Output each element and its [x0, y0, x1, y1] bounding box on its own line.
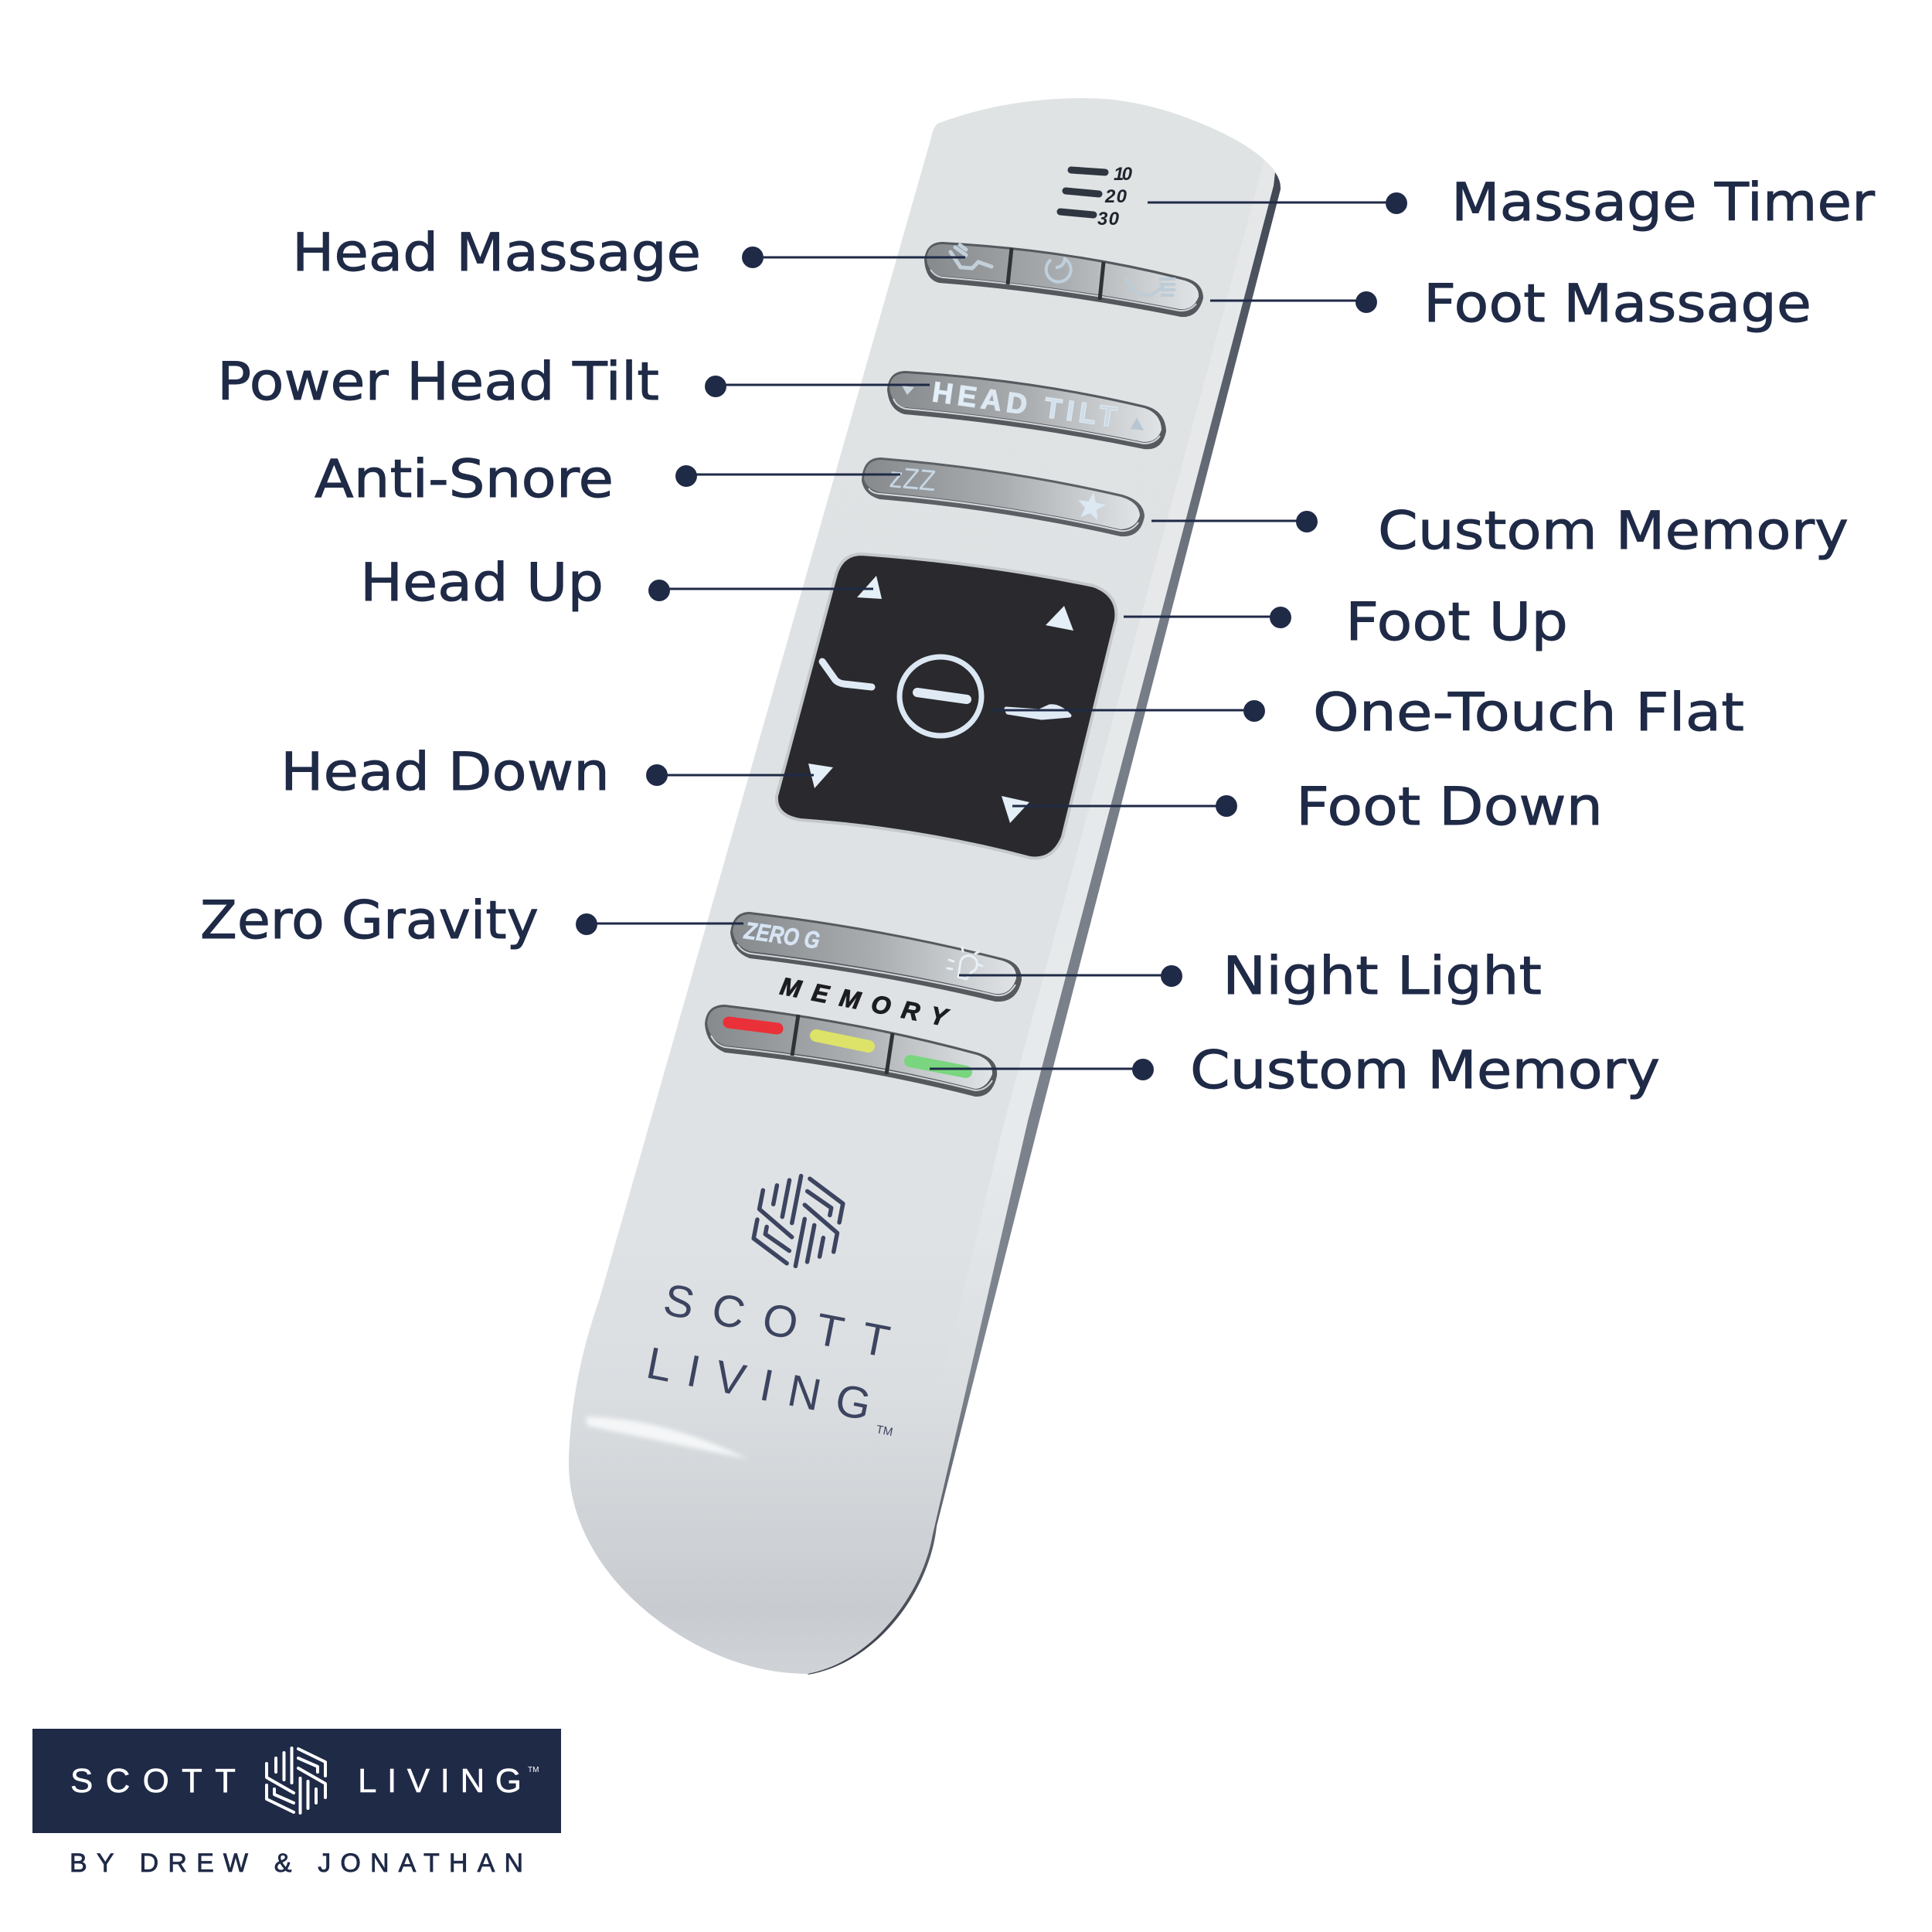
anti-snore and custom memory button — [862, 457, 1145, 536]
head tilt label: HEAD TILT — [930, 376, 1119, 433]
callout: Foot Massage: Foot Massage — [1423, 274, 1811, 335]
head tilt button — [887, 371, 1166, 449]
foot up arrow — [1046, 606, 1073, 631]
foot down arrow — [1002, 796, 1029, 823]
icon: tilt up arrow — [1131, 417, 1144, 430]
callout: Head Down — [281, 742, 814, 803]
flat button bar — [917, 692, 967, 699]
callout: Head Down: Head Down — [281, 742, 610, 803]
callout: Anti-Snore: Anti-Snore — [315, 449, 614, 510]
memory buttons — [705, 1005, 997, 1097]
callout: Foot Down: Foot Down — [1296, 777, 1603, 838]
callout: One-Touch Flat — [992, 682, 1744, 743]
byline: BY DREW & JONATHAN — [70, 1849, 523, 1878]
callout: Anti-Snore — [315, 449, 900, 510]
logo wordmark: SCOTT: SCOTT — [70, 1762, 236, 1800]
massage timer indicators: 10 — [1114, 164, 1133, 185]
icon: massage wave — [1046, 259, 1071, 282]
brand name on remote: LIVING — [643, 1338, 876, 1430]
icon: head massage — [951, 245, 992, 268]
brand logo mark on remote — [750, 1169, 847, 1273]
control pad — [777, 554, 1116, 858]
callout: Zero Gravity: Zero Gravity — [200, 890, 539, 951]
callout: One-Touch Flat: One-Touch Flat — [1313, 682, 1744, 743]
logo wordmark: LIVING: LIVING — [358, 1762, 522, 1800]
callout: Foot Up: Foot Up — [1345, 592, 1568, 653]
callout: Zero Gravity — [200, 890, 743, 951]
flat button ring — [900, 657, 981, 736]
head down arrow — [808, 764, 833, 788]
callout: Custom Memory (star button) — [1151, 501, 1849, 562]
icon: tilt down arrow — [902, 386, 914, 395]
brand name on remote: SCOTT — [660, 1274, 893, 1367]
icon: head incline — [822, 662, 872, 687]
callout: Night Light — [959, 946, 1542, 1007]
callout: Power Head Tilt: Power Head Tilt — [217, 352, 659, 413]
brand logo bar — [32, 1729, 561, 1833]
callout: Custom Memory (color buttons): Custom Memory — [1190, 1040, 1660, 1101]
remote side edge — [808, 164, 1281, 1675]
icon: star — [1078, 492, 1106, 520]
head up arrow — [857, 576, 882, 599]
callout: Head Massage — [292, 223, 965, 284]
callout: Night Light: Night Light — [1223, 946, 1542, 1007]
massage buttons — [924, 242, 1203, 317]
callout: Custom Memory (color buttons) — [930, 1040, 1660, 1101]
callout: Head Up — [360, 553, 873, 614]
massage timer indicators: 30 — [1097, 209, 1120, 230]
yellow memory light — [816, 1036, 869, 1046]
zero g and night light button — [730, 912, 1022, 1002]
callouts — [200, 172, 1875, 1101]
callout: Massage Timer — [1148, 172, 1875, 233]
memory heading: MEMORY — [778, 972, 951, 1032]
trademark: TM — [528, 1766, 539, 1774]
icon: foot massage — [1125, 278, 1175, 295]
zero g label: ZERO G — [742, 917, 821, 954]
massage timer indicators: 20 — [1104, 186, 1128, 207]
face bevel highlight — [939, 160, 1275, 1399]
brand name on remote — [643, 1274, 894, 1439]
glare on lower body — [586, 1417, 748, 1459]
callout: Foot Massage — [1210, 274, 1811, 335]
callout: Foot Up — [1124, 592, 1568, 653]
icon: foot incline — [1006, 706, 1070, 718]
callout: Custom Memory (star button): Custom Memory — [1378, 501, 1849, 562]
callout: Massage Timer: Massage Timer — [1451, 172, 1875, 233]
zZZ label: zZZ — [888, 461, 937, 498]
logo mark — [267, 1748, 325, 1813]
callout: Power Head Tilt — [217, 352, 930, 413]
callout: Head Up: Head Up — [360, 553, 604, 614]
callout: Foot Down — [1012, 777, 1603, 838]
remote face — [569, 98, 1275, 1674]
icon: bulb — [947, 947, 982, 979]
remote control — [569, 98, 1281, 1675]
callout: Head Massage: Head Massage — [292, 223, 701, 284]
red memory light — [729, 1022, 777, 1029]
massage timer indicators — [1060, 164, 1133, 230]
brand name on remote: TM — [875, 1423, 894, 1439]
green memory light — [910, 1061, 966, 1072]
